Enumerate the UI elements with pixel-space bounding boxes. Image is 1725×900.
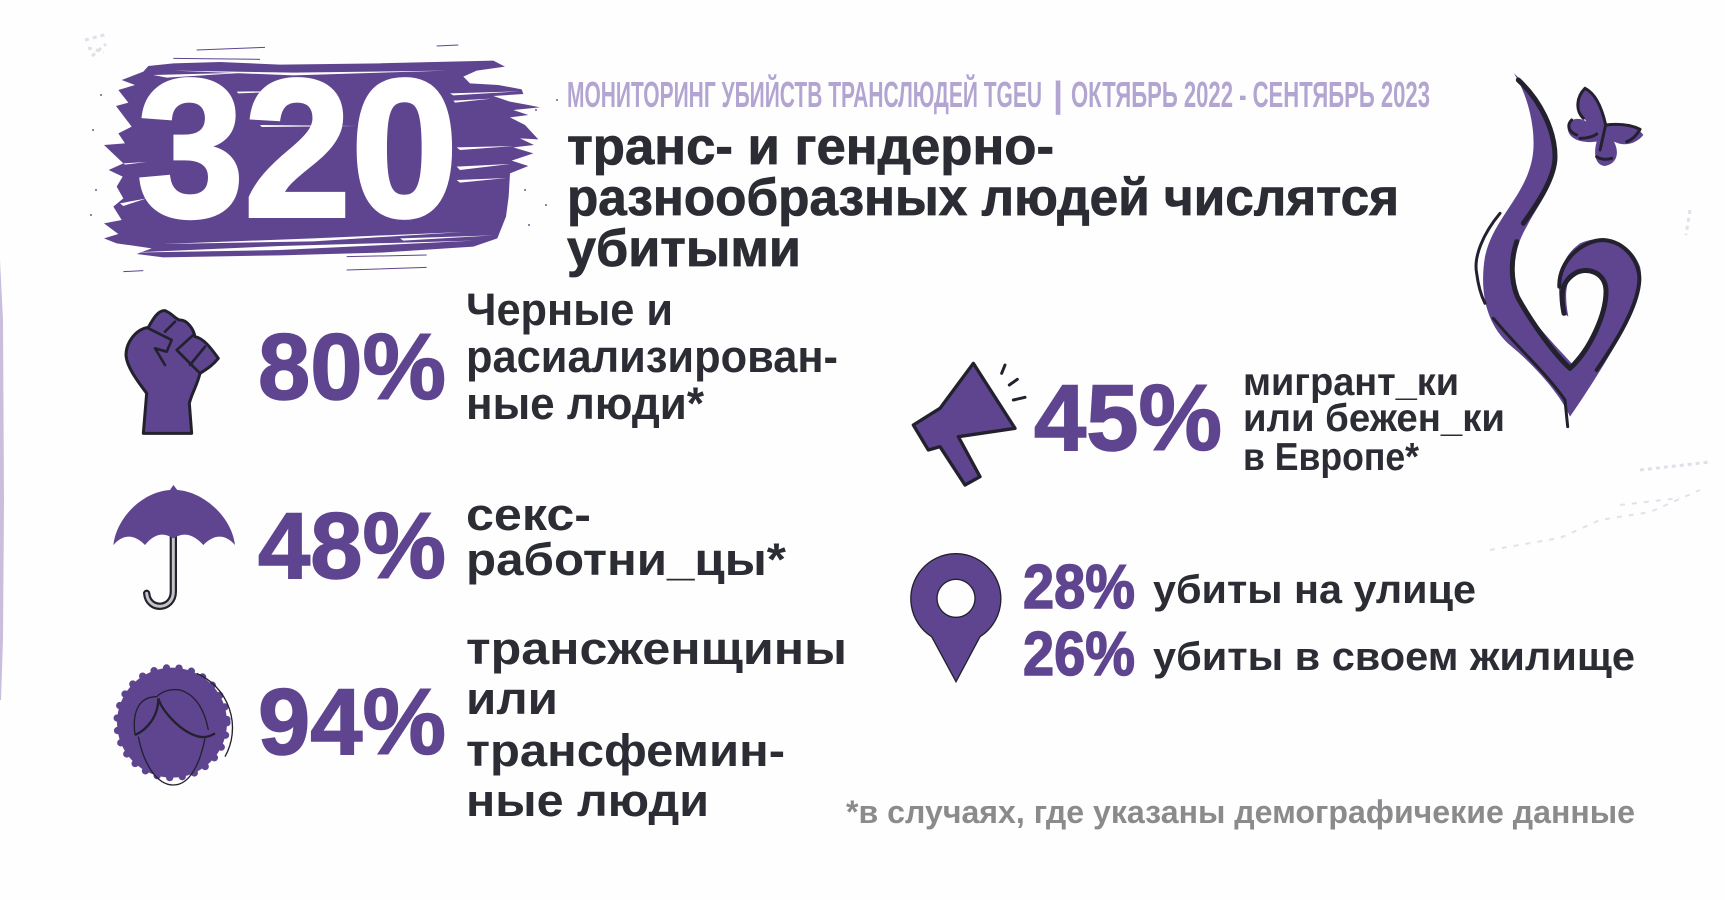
stat: 26% killed at home: 26% (1023, 620, 1135, 689)
label: sex workers: работни_цы* (466, 534, 787, 585)
label: migrants: мигрант_ки (1243, 361, 1459, 404)
icon: umbrella (113, 485, 235, 606)
label: trans women: трансфемин- (466, 725, 785, 776)
heading: разнообразных людей числятся (567, 169, 1399, 227)
subtitle: ОКТЯБРЬ 2022 - СЕНТЯБРЬ 2023 (1071, 74, 1430, 115)
icon: megaphone (913, 363, 1025, 485)
label: migrants: в Европе* (1243, 436, 1420, 479)
label: trans women: ные люди (466, 775, 709, 826)
label: racialized people: Черные и (466, 284, 673, 335)
stat: 26% killed at home (1023, 620, 1635, 689)
subtitle: | (1053, 74, 1063, 116)
stat: 28% killed on street: убиты на улице (1153, 568, 1476, 612)
icon: fist (126, 311, 218, 433)
heading (567, 118, 1399, 278)
heading: транс- и гендерно- (567, 118, 1054, 176)
brush stroke with 320 (104, 39, 540, 272)
label: trans women: трансженщины (466, 623, 847, 674)
label: migrants (1243, 361, 1505, 479)
stat: 28% killed on street (1023, 553, 1476, 622)
label: migrants: или бежен_ки (1243, 397, 1505, 440)
label: racialized people: расиализирован- (466, 331, 838, 382)
label: trans women (466, 623, 847, 826)
icon: map pin (911, 554, 1001, 682)
stat: 48%: 48% (258, 493, 446, 598)
number 320: 320 (137, 39, 458, 258)
label: sex workers: секс- (466, 489, 591, 540)
stat: 80%: 80% (258, 314, 446, 419)
label: sex workers (466, 489, 787, 585)
stat: 45%: 45% (1034, 365, 1222, 470)
footnote: *в случаях, где указаны демографичекие данные (846, 794, 1635, 830)
logo: flame spiral with butterfly (1476, 73, 1643, 427)
subtitle: МОНИТОРИНГ УБИЙСТВ ТРАНСЛЮДЕЙ TGEU (567, 73, 1042, 115)
heading: убитыми (567, 220, 801, 278)
stat: 26% killed at home: убиты в своем жилище (1153, 635, 1635, 679)
stat: 94%: 94% (258, 669, 446, 774)
label: trans women: или (466, 673, 558, 724)
stat: 28% killed on street: 28% (1023, 553, 1135, 622)
icon: afro head (117, 668, 232, 785)
label: racialized people (466, 284, 838, 429)
label: racialized people: ные люди* (466, 378, 704, 429)
butterfly (1568, 88, 1643, 166)
